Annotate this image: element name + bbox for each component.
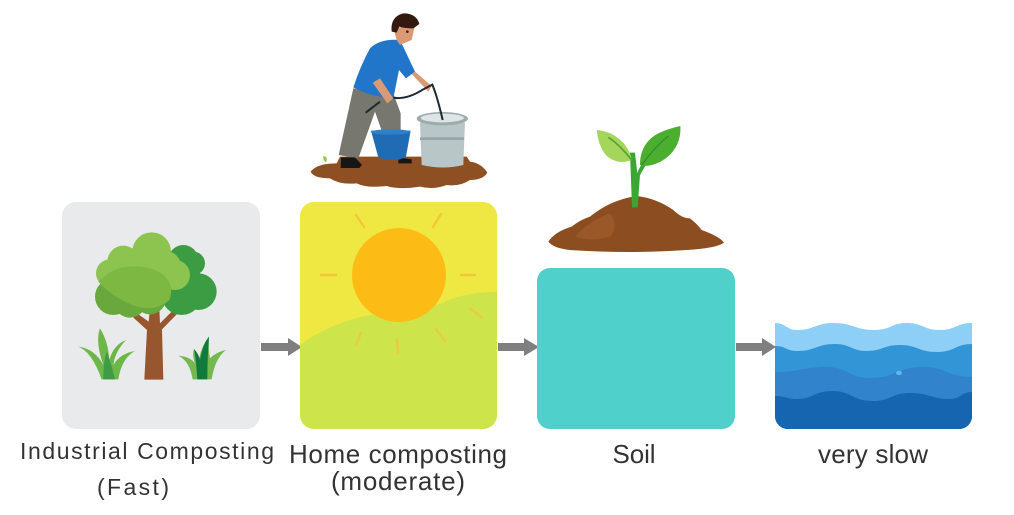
hose [366, 85, 443, 120]
illustration: man filling buckets [311, 13, 487, 188]
label: soil: Soil [612, 439, 656, 469]
arrow: home to soil [498, 338, 539, 356]
shoes [341, 157, 362, 168]
label: fast: (Fast) [97, 474, 169, 500]
label: industrial composting: Industrial Composting [20, 438, 274, 464]
panel: home composting [300, 202, 497, 429]
arrow: soil to water [736, 338, 776, 356]
icon: tree [78, 232, 226, 380]
gray bucket [417, 112, 468, 167]
icon: sun [321, 214, 475, 322]
panel: industrial composting [62, 202, 260, 429]
head [393, 25, 415, 45]
blue bucket [371, 129, 411, 160]
torso and sleeves [353, 40, 415, 98]
label: very slow: very slow [818, 439, 928, 469]
panel: water [775, 323, 972, 429]
label: moderate: (moderate) [331, 466, 465, 496]
hill [300, 292, 497, 429]
panel: soil [537, 268, 735, 429]
bubble [896, 371, 902, 375]
icon: left grass [78, 328, 135, 379]
soil mound [311, 157, 487, 188]
illustration: seedling on soil mound [548, 126, 724, 252]
arms [373, 78, 393, 103]
legs [339, 88, 401, 158]
sprout [323, 156, 327, 163]
label: home composting: Home composting [289, 439, 507, 469]
icon: right grass [178, 337, 226, 379]
arrow: industrial to home [261, 338, 302, 356]
